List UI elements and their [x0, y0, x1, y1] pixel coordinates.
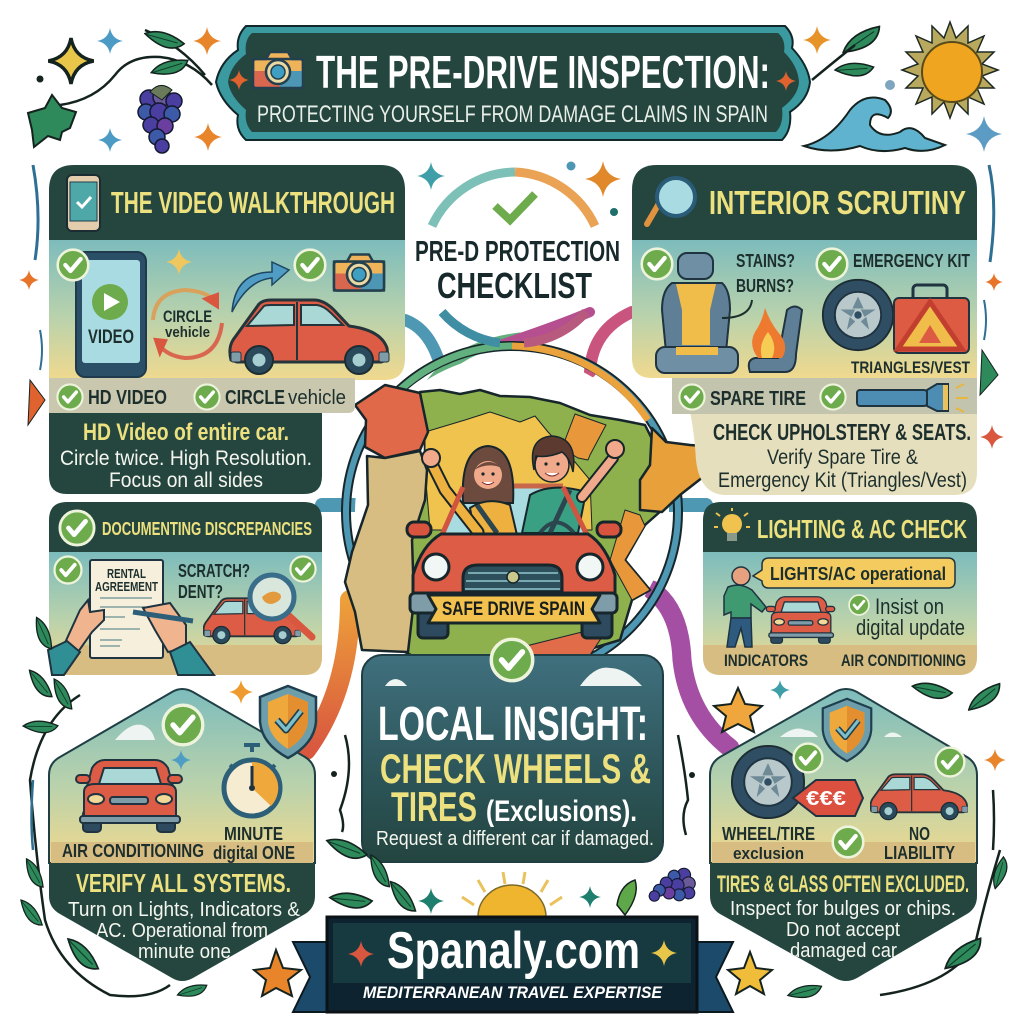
- icon: check: [820, 384, 846, 410]
- text block background: [690, 412, 977, 495]
- illustration: red car: [871, 774, 968, 820]
- icon: wave: [804, 98, 945, 151]
- brand name: Spanaly.com: [387, 922, 640, 980]
- panel header: [49, 165, 405, 240]
- labels: MINUTE: [224, 824, 283, 844]
- highlighted text: TIRES: [391, 783, 477, 830]
- ribbon right: [694, 942, 733, 1012]
- person: woman: [422, 446, 517, 535]
- text block: Circle twice. High Resolution.: [60, 447, 312, 470]
- text block: AC. Operational from: [96, 920, 268, 942]
- couple in the car: [407, 436, 624, 638]
- labels: digital ONE: [213, 843, 295, 863]
- highlighted text: [380, 745, 651, 830]
- illustration: red car front: [766, 597, 835, 643]
- icon: small seat: [749, 306, 802, 372]
- text block: [717, 871, 969, 962]
- icon: check: [495, 194, 535, 220]
- icon: sun: [902, 22, 998, 118]
- icon: left star: [229, 70, 249, 90]
- vines left: [30, 695, 170, 996]
- map of Spain: [345, 385, 718, 680]
- icon: check: [794, 744, 822, 772]
- icon: tire: [732, 746, 804, 818]
- icon: check: [849, 595, 869, 615]
- icon: rental agreement: RENTAL: [107, 566, 146, 581]
- person: man: [522, 436, 624, 533]
- checklist strip: [672, 378, 977, 414]
- top-right decoration: [803, 22, 1003, 291]
- text block: Emergency Kit (Triangles/Vest): [718, 469, 967, 492]
- badge text: [415, 236, 620, 306]
- icon: person: [724, 567, 766, 647]
- icon: cloud: [115, 725, 155, 740]
- label: EMERGENCY KIT: [853, 251, 970, 271]
- panel: the video walkthrough: [49, 165, 405, 494]
- tagline: MEDITERRANEAN TRAVEL EXPERTISE: [363, 983, 663, 1002]
- icon: car front: [76, 760, 182, 832]
- icon: grapes: [643, 865, 700, 912]
- ribbon left: [293, 942, 330, 1012]
- labels: WHEEL/TIRE: [722, 824, 815, 844]
- text block: Turn on Lights, Indicators &: [68, 899, 301, 921]
- icon: car seat: [656, 253, 738, 373]
- icon: check: [54, 556, 82, 584]
- region: Andalusia: [470, 625, 610, 680]
- hexagon top: [710, 689, 977, 863]
- text block: Insist on: [875, 594, 944, 619]
- icon: flashlight: [857, 384, 968, 412]
- icon: shield: [823, 699, 871, 761]
- icon: phone: [67, 175, 100, 231]
- callout: stains and burns: STAINS?: [736, 251, 795, 271]
- gauge arcs: [432, 172, 595, 343]
- icon: camera: [334, 254, 384, 290]
- icon: stopwatch: [224, 745, 280, 816]
- icon: check: [290, 556, 316, 582]
- panel header: [632, 165, 977, 240]
- connector ribbons: [306, 312, 730, 750]
- labels: AIR CONDITIONING: [62, 841, 204, 861]
- region: Castile: [425, 412, 592, 530]
- panel header: [703, 502, 977, 552]
- panel header: [49, 502, 322, 552]
- icon: check: [194, 384, 220, 410]
- icon: magnifier: [647, 178, 695, 224]
- badge text: CHECKLIST: [437, 265, 592, 306]
- icon: sun rising: [462, 872, 562, 917]
- icon: hands and pen: [48, 600, 214, 675]
- top-left decoration: [19, 25, 222, 290]
- callout: lights ac operational: [753, 558, 955, 588]
- icon: check: [936, 748, 964, 776]
- label: TRIANGLES/VEST: [851, 358, 970, 377]
- icon: magnifier: [250, 575, 312, 637]
- circle label: [163, 307, 212, 341]
- icon: blue arrow: [232, 262, 289, 312]
- icon: check: [60, 511, 94, 545]
- highlighted text: (Exclusions).: [486, 795, 637, 828]
- badge text: PRE-D PROTECTION: [415, 236, 620, 268]
- labels: [722, 824, 955, 863]
- car front: [407, 487, 621, 638]
- icon: circle arrows: [153, 290, 222, 358]
- icon: clouds: [385, 668, 642, 686]
- text block: damaged car: [790, 940, 897, 962]
- banner text: SAFE DRIVE SPAIN: [442, 599, 585, 620]
- footer banner: [293, 917, 733, 1012]
- circle label: vehicle: [165, 324, 210, 341]
- icon: check: [679, 384, 705, 410]
- bottom and side decorations: [18, 300, 1012, 999]
- map ring: [346, 346, 678, 678]
- text block: Inspect for bulges or chips.: [730, 898, 956, 920]
- icon: check: [817, 249, 847, 279]
- panel: verify all systems: [49, 686, 316, 981]
- text block: Do not accept: [786, 919, 900, 941]
- heading: DOCUMENTING DISCREPANCIES: [102, 519, 312, 539]
- icon: light bulb: [714, 508, 750, 541]
- icon: sparkle: [171, 750, 191, 770]
- text block: minute one: [138, 941, 231, 963]
- text block: Verify Spare Tire &: [767, 446, 918, 469]
- icon: spare tire: [823, 280, 893, 350]
- checklist strip: [49, 378, 355, 413]
- icon: stars: [348, 941, 374, 967]
- icon: emergency kit and triangle: [894, 285, 969, 353]
- labels: exclusion: [733, 844, 804, 863]
- icon: price tag: [793, 780, 863, 816]
- subtitle: PROTECTING YOURSELF FROM DAMAGE CLAIMS IN SPAIN: [257, 101, 768, 128]
- icon: check: [295, 250, 325, 280]
- text block: [856, 594, 965, 640]
- icon: large phone with video: [76, 252, 146, 377]
- icon: check: [491, 639, 533, 681]
- panel: documenting discrepancies: [48, 502, 322, 675]
- panel body: [632, 240, 977, 378]
- region: Spain base: [405, 390, 662, 680]
- labels: [62, 824, 295, 863]
- callout: scratch and dent: DENT?: [178, 582, 223, 602]
- panel: interior scrutiny: [632, 165, 977, 495]
- icon: sparkle: [166, 249, 192, 275]
- title text: THE PRE-DRIVE INSPECTION:: [316, 46, 770, 98]
- labels: LIABILITY: [884, 843, 955, 863]
- icon: check: [163, 705, 203, 745]
- icon: clouds: [780, 729, 902, 737]
- region: Portugal: [345, 451, 427, 652]
- text block: [713, 419, 971, 492]
- region: Valencia: [610, 510, 650, 600]
- icon: camera: [253, 52, 303, 88]
- highlighted text: CHECK WHEELS &: [380, 745, 651, 792]
- text block: [68, 868, 301, 963]
- icon: check: [57, 384, 83, 410]
- icon: check: [642, 249, 672, 279]
- label: [225, 387, 346, 409]
- callout: stains and burns: [722, 251, 795, 318]
- heading: LOCAL INSIGHT:: [378, 698, 648, 751]
- icon: flame: [752, 308, 785, 358]
- region: Catalonia: [640, 428, 718, 512]
- icon: shield: [260, 686, 316, 758]
- hexagon top: [49, 689, 315, 863]
- windshield: [442, 486, 587, 535]
- vines right: [880, 850, 1000, 995]
- label: SPARE TIRE: [710, 388, 806, 410]
- panel body: [49, 552, 322, 675]
- text block: HD Video of entire car.: [83, 419, 289, 446]
- panel: local insight: [362, 639, 663, 862]
- icon: large phone with video: VIDEO: [88, 327, 134, 348]
- central checklist badge: [415, 161, 621, 343]
- banner plate: [327, 917, 697, 1012]
- icon: check: [833, 827, 863, 857]
- label: CIRCLE: [225, 387, 285, 409]
- body text: Request a different car if damaged.: [376, 828, 654, 850]
- labels: AIR CONDITIONING: [841, 651, 966, 670]
- labels: NO: [909, 824, 930, 844]
- panel: lighting and ac check: [703, 502, 977, 675]
- label: vehicle: [288, 387, 346, 409]
- text block: digital update: [856, 615, 965, 640]
- icon: rental agreement: AGREEMENT: [95, 579, 158, 594]
- panel: tires and glass: [710, 689, 977, 981]
- illustration: damaged car: [204, 598, 301, 644]
- icon: rental agreement: [90, 560, 163, 658]
- callout: scratch and dent: [178, 561, 250, 602]
- labels: [724, 651, 966, 670]
- icon: stars: [714, 688, 762, 732]
- region: Aragon: [562, 414, 606, 460]
- labels: INDICATORS: [724, 651, 808, 670]
- text block: [49, 413, 322, 494]
- panel body: [703, 552, 977, 675]
- icon: check: [58, 250, 88, 280]
- title banner: [216, 26, 810, 140]
- text block: Focus on all sides: [109, 469, 263, 492]
- heading: THE VIDEO WALKTHROUGH: [111, 185, 395, 220]
- hexagon bottom: [710, 863, 977, 981]
- text block: VERIFY ALL SYSTEMS.: [76, 868, 291, 898]
- hexagon bottom: [49, 863, 315, 981]
- icon: price tag: €€€: [806, 788, 846, 810]
- circle label: CIRCLE: [163, 307, 212, 326]
- label: HD VIDEO: [88, 387, 167, 409]
- illustration: red car: [230, 300, 389, 374]
- region: Galicia: [355, 385, 428, 458]
- panel body: [49, 240, 405, 380]
- callout: lights ac operational: LIGHTS/AC operational: [770, 564, 946, 584]
- icon: right star: [776, 71, 796, 91]
- callout: stains and burns: BURNS?: [736, 276, 794, 296]
- callout: scratch and dent: SCRATCH?: [178, 561, 250, 581]
